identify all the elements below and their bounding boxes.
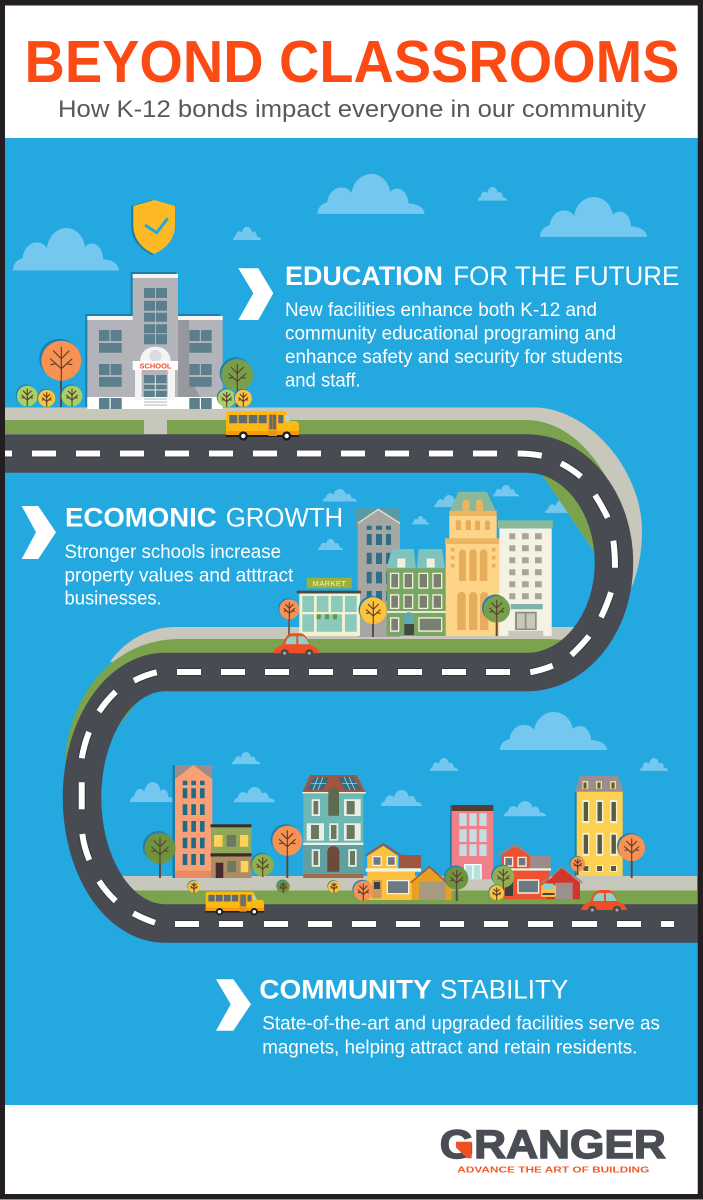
- red car lower road: [581, 890, 627, 914]
- body text: property values and atttract: [64, 565, 294, 587]
- body text: and staff.: [285, 370, 361, 392]
- school trees: [16, 339, 253, 407]
- market shop: [297, 578, 361, 636]
- heading: [65, 503, 343, 533]
- school bus top road: [226, 411, 299, 441]
- body text: community educational programing and: [285, 322, 616, 344]
- heading: ECOMONIC: [65, 503, 217, 533]
- body text: State-of-the-art and upgraded facilities serve as: [262, 1012, 660, 1034]
- heading: [259, 974, 569, 1004]
- footer panel: [0, 1105, 703, 1200]
- panel: education text: [238, 261, 679, 392]
- body text: businesses.: [64, 587, 162, 609]
- lower trees: [143, 824, 645, 901]
- school entrance: SCHOOL: [140, 363, 172, 370]
- body text: Stronger schools increase: [64, 541, 281, 563]
- heading: STABILITY: [440, 974, 569, 1004]
- subtitle: How K-12 bonds impact everyone in our community: [58, 96, 646, 123]
- roadside verges: [5, 408, 697, 910]
- green building: [387, 549, 446, 636]
- chevron: [238, 268, 273, 320]
- heading: GROWTH: [226, 503, 343, 533]
- logo: Granger: ADVANCE THE ART OF BUILDING: [457, 1165, 650, 1175]
- pink tower: [450, 805, 493, 879]
- red car: [273, 633, 319, 658]
- heading: FOR THE FUTURE: [453, 261, 679, 291]
- chevron: [22, 506, 56, 559]
- body text: [64, 541, 294, 609]
- title: BEYOND CLASSROOMS: [24, 29, 680, 95]
- grey tower: [356, 508, 400, 637]
- clouds: [13, 174, 668, 816]
- city block: middle buildings: [273, 492, 553, 658]
- middle trees: [278, 595, 510, 637]
- heading: EDUCATION: [285, 261, 443, 291]
- yellow house: [365, 843, 421, 900]
- road centre dashes: [5, 454, 674, 924]
- header panel: [0, 0, 703, 139]
- logo: Granger: GRANGER: [440, 1123, 666, 1167]
- red garage: [542, 867, 582, 899]
- school building: [85, 272, 223, 409]
- salmon tower: [172, 765, 212, 878]
- panel: economic growth text: [22, 503, 343, 609]
- school bus lower road: [206, 892, 264, 915]
- heading: COMMUNITY: [259, 974, 432, 1004]
- icon: security shield: [131, 200, 175, 255]
- yellow car front: [541, 884, 556, 897]
- red house: [497, 843, 551, 899]
- body text: New facilities enhance both K-12 and: [285, 299, 597, 321]
- heading: [285, 261, 679, 291]
- body text: enhance safety and security for students: [285, 346, 623, 368]
- yellow tower: [445, 492, 501, 636]
- teal house: [302, 775, 366, 878]
- yellow tall building: [575, 776, 623, 876]
- olive shop: [210, 824, 252, 878]
- body text: [285, 299, 623, 392]
- body text: magnets, helping attract and retain residents.: [262, 1036, 637, 1058]
- orange garage: [411, 867, 452, 900]
- market shop: MARKET: [312, 579, 346, 588]
- white tower: [498, 520, 553, 636]
- city block: lower buildings: [143, 765, 645, 915]
- body text: [262, 1012, 660, 1058]
- road: [0, 454, 703, 924]
- chevron: [216, 979, 251, 1031]
- panel: community stability text: [216, 974, 660, 1058]
